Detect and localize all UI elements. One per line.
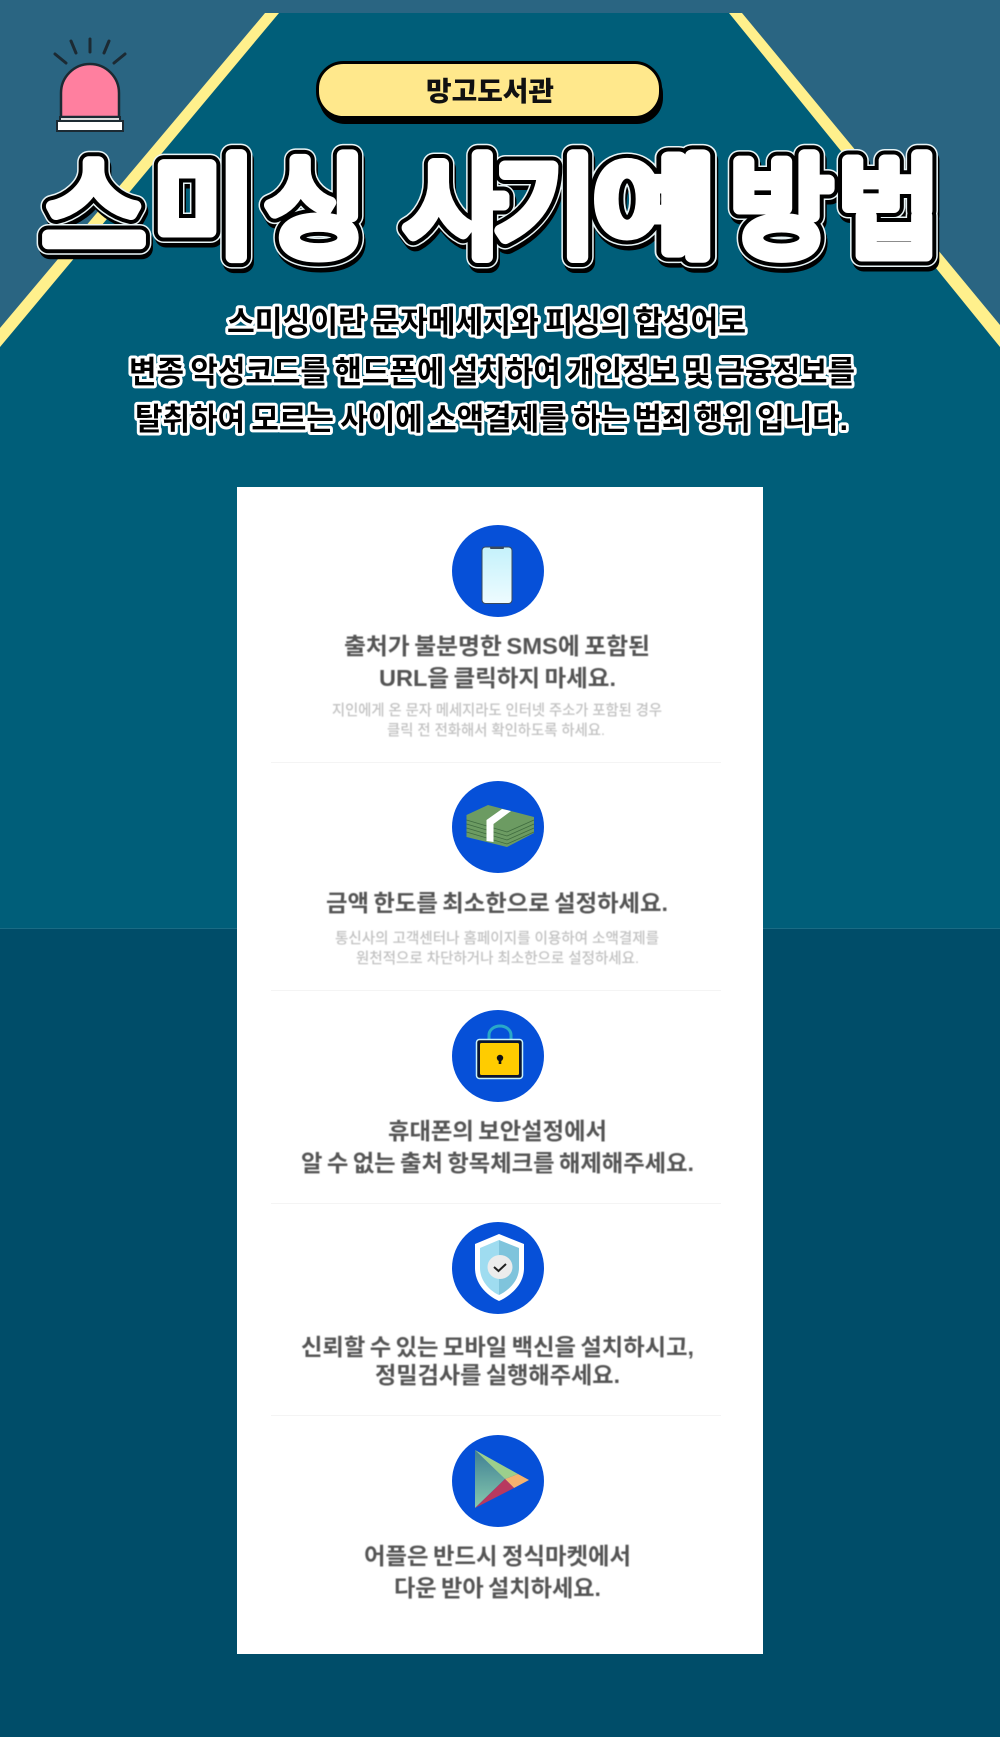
tip 1 heading xyxy=(344,633,650,691)
tip 5 heading xyxy=(364,1543,631,1601)
tip 2 description: 통신사의 고객센터나 홈페이지를 이용하여 소액결제를 xyxy=(335,930,659,947)
title: 스미싱사기방법 xyxy=(42,147,941,272)
tip 1 xyxy=(332,525,662,739)
icon: siren xyxy=(55,39,125,131)
tip 3 heading xyxy=(301,1118,694,1176)
intro line 2: 변종 악성코드를 핸드폰에 설치하여 개인정보 및 금융정보를 xyxy=(129,355,855,390)
tip 3 xyxy=(301,1010,694,1176)
intro line 1: 스미싱이란 문자메세지와 피싱의 합성어로 xyxy=(227,305,746,340)
tip 4 heading: 신뢰할 수 있는 모바일 백신을 설치하시고, xyxy=(301,1334,694,1360)
tip 5 heading: 다운 받아 설치하세요. xyxy=(394,1575,601,1601)
title: 예 xyxy=(593,148,717,272)
title: 스미싱사기방법 xyxy=(42,147,941,272)
tip 1 description xyxy=(332,702,662,739)
icon: play store xyxy=(452,1435,544,1527)
tip 3 heading: 알 수 없는 출처 항목체크를 해제해주세요. xyxy=(301,1150,694,1176)
tip 1 description: 지인에게 온 문자 메세지라도 인터넷 주소가 포함된 경우 xyxy=(332,702,662,719)
tip 4 xyxy=(301,1222,694,1388)
intro line 3: 탈취하여 모르는 사이에 소액결제를 하는 범죄 행위 입니다. xyxy=(135,402,848,437)
tip 2 xyxy=(326,781,668,967)
tip 1 description: 클릭 전 전화해서 확인하도록 하세요. xyxy=(387,722,605,739)
title: 예 xyxy=(593,148,717,272)
tip 2 description xyxy=(335,930,659,967)
title: 예 xyxy=(593,148,717,272)
intro line 3: 탈취하여 모르는 사이에 소액결제를 하는 범죄 행위 입니다. xyxy=(135,402,848,437)
yellow perspective lines xyxy=(0,13,1000,347)
tip 2 description: 원천적으로 차단하거나 최소한으로 설정하세요. xyxy=(356,950,639,967)
badge: library name xyxy=(318,62,663,124)
tip 4 heading: 정밀검사를 실행해주세요. xyxy=(375,1362,620,1388)
title: 스미싱사기방법 xyxy=(42,147,941,272)
icon: security shield xyxy=(452,1222,544,1314)
tip 1 heading: URL을 클릭하지 마세요. xyxy=(379,665,616,691)
tip 5 heading: 어플은 반드시 정식마켓에서 xyxy=(364,1543,631,1569)
intro line 1: 스미싱이란 문자메세지와 피싱의 합성어로 xyxy=(227,305,746,340)
intro text xyxy=(129,305,855,437)
intro line 2: 변종 악성코드를 핸드폰에 설치하여 개인정보 및 금융정보를 xyxy=(129,355,855,390)
tip 1 heading: 출처가 불분명한 SMS에 포함된 xyxy=(344,633,650,659)
icon: smartphone xyxy=(452,525,544,617)
tip 5 xyxy=(364,1435,631,1601)
tip 3 heading: 휴대폰의 보안설정에서 xyxy=(388,1118,607,1144)
badge: library name: 망고도서관 xyxy=(426,70,554,109)
icon: padlock xyxy=(452,1010,544,1102)
tip 4 heading xyxy=(301,1334,694,1388)
icon: money stack xyxy=(452,781,544,873)
tip 2 heading: 금액 한도를 최소한으로 설정하세요. xyxy=(326,890,668,916)
panel: smishing prevention tips xyxy=(237,487,763,1654)
title: 예 xyxy=(595,153,719,277)
title: 스미싱사기방법 xyxy=(44,152,943,277)
